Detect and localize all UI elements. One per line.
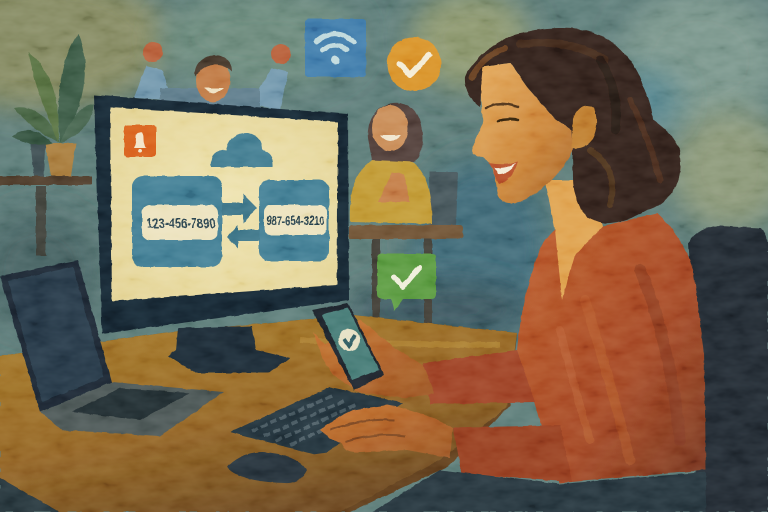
computer monitor [94,95,349,373]
hand holding phone [313,320,434,398]
panel: left phone number: 123-456-7890 [146,215,216,231]
icon: wifi badge [305,19,366,77]
icon: notification bell [124,125,156,157]
hair [465,28,681,223]
panel: left phone number [132,176,222,267]
monitor frame [94,95,349,334]
face [472,63,573,203]
screen [110,107,338,301]
hand on keyboard [320,405,453,458]
clapping woman in yellow [349,103,463,325]
sweater folds [560,270,680,460]
dark trousers [372,470,706,512]
eye and eyebrow [486,104,518,121]
icon: orange check badge [387,37,441,91]
panel: right phone number: 987-654-3210 [266,214,325,228]
arrow: right [222,194,257,223]
keyboard [230,387,403,454]
chair [688,226,768,512]
cheering man behind monitor [134,42,291,110]
monitor stand [168,326,290,373]
neck [545,180,603,300]
smartphone [312,303,384,390]
laptop [0,260,224,436]
icon: heart check on phone [338,329,360,351]
panel: right phone number [259,180,329,261]
icon: green message check [377,254,436,311]
hair highlights [472,43,660,205]
desk [0,315,517,512]
potted plant on shelf [0,34,94,256]
arrow: left [227,225,260,249]
lower sleeve [453,425,572,482]
woman [465,28,706,483]
upper sleeve [423,350,535,404]
smile [489,162,518,184]
ear [572,106,597,148]
icon: computer mouse [227,452,307,483]
icon: cloud [211,133,273,167]
sweater torso [517,213,706,483]
